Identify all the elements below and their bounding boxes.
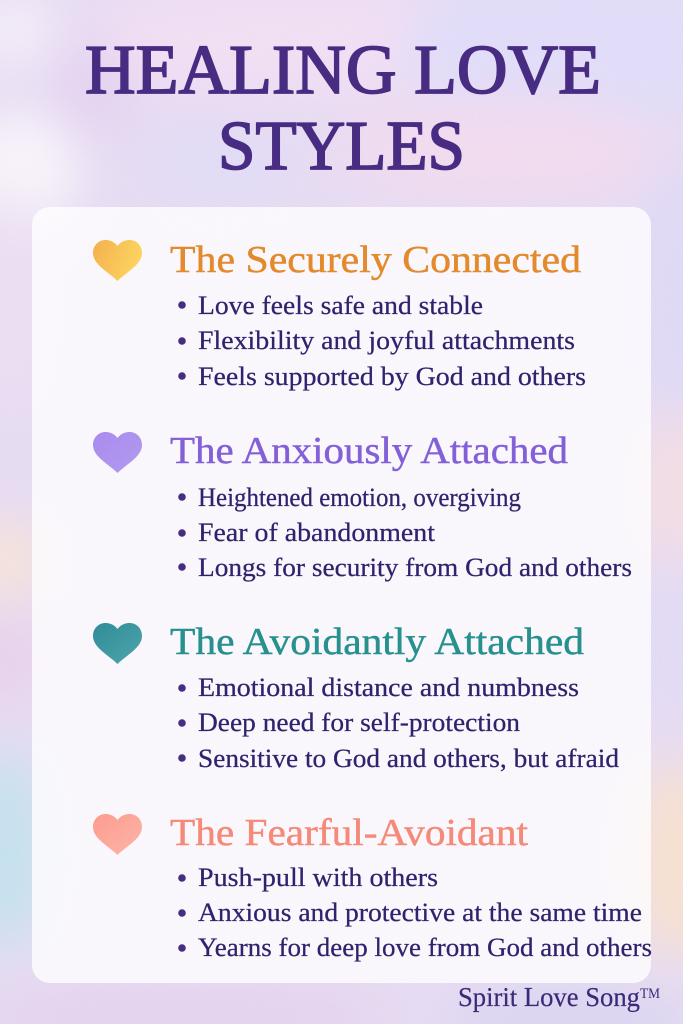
section: The Avoidantly Attached [93,621,619,773]
footer brand: Spirit Love Song [458,982,640,1012]
bullet list: Longs for security from God and others [198,553,632,582]
title [85,32,601,185]
icon: purple heart [93,432,142,473]
bullet list: Sensitive to God and others, but afraid [198,744,619,773]
section: The Securely Connected [93,239,586,391]
bullet list: Feels supported by God and others [198,362,586,391]
heading: The Anxiously Attached [170,430,568,472]
heading: The Fearful-Avoidant [170,812,528,854]
bullet list: Flexibility and joyful attachments [198,326,575,355]
bullet list [178,291,586,391]
bullet list [178,483,632,582]
title: STYLES [218,108,465,185]
icon: teal heart [93,623,142,664]
bullet list: Love feels safe and stable [198,291,483,320]
bullet list [178,673,619,773]
heading: The Securely Connected [170,239,581,281]
bullet list [178,863,652,962]
panel: content card [32,207,651,983]
bullet list: Heightened emotion, overgiving [198,483,521,512]
section: The Fearful-Avoidant [93,812,652,962]
bullet list: Anxious and protective at the same time [198,898,642,927]
bullet list: Push-pull with others [198,863,438,892]
icon: gold heart [93,240,142,281]
bullet list: Fear of abandonment [198,518,436,547]
bullet list: Emotional distance and numbness [198,673,579,702]
heading: The Avoidantly Attached [170,621,584,663]
section: The Anxiously Attached [93,430,632,582]
bullet list: Yearns for deep love from God and others [198,933,652,962]
icon: coral heart [93,814,142,855]
footer brand: TM [640,986,660,1002]
title: HEALING LOVE [85,32,601,109]
bullet list: Deep need for self-protection [198,708,520,737]
